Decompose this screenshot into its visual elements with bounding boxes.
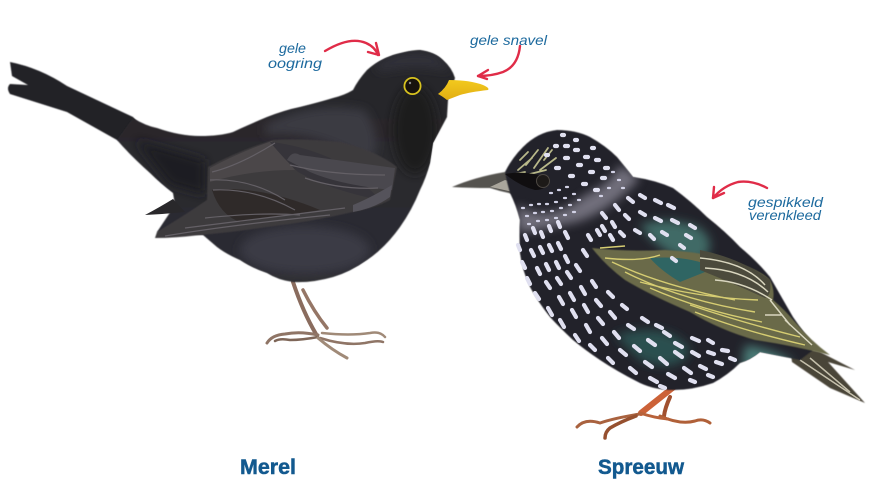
arrow: naar gele snavel (478, 46, 520, 79)
merel back sheen (264, 104, 378, 153)
label: gespikkeld verenkleed: verenkleed (749, 207, 822, 223)
spreeuw crown buff streaks (510, 148, 556, 175)
illustration: merel (blackbird) (8, 50, 488, 358)
illustration: spreeuw (starling) (452, 130, 865, 438)
spreeuw tail (790, 345, 865, 403)
merel head (375, 53, 450, 72)
merel legs (267, 282, 385, 358)
merel tail (8, 62, 160, 150)
spreeuw body shading (517, 165, 795, 368)
heading: Spreeuw: Spreeuw (598, 456, 685, 479)
arrow: naar gele oogring (325, 41, 379, 55)
merel wing (155, 139, 397, 238)
spreeuw white spots (518, 135, 735, 388)
spreeuw small throat spots (522, 172, 624, 224)
label: gele snavel: gele snavel (470, 32, 548, 48)
merel eye with yellow ring (404, 77, 422, 95)
spreeuw eye stripe (505, 173, 550, 190)
label: gele oogring (268, 40, 322, 71)
merel body (117, 50, 455, 282)
spreeuw wing (592, 246, 830, 355)
spreeuw beak (452, 172, 530, 195)
arrow: naar gespikkeld verenkleed (713, 182, 767, 198)
spreeuw eye (536, 174, 550, 188)
merel belly sheen (240, 226, 370, 274)
spreeuw body (505, 130, 817, 390)
spreeuw iridescent patches (640, 221, 710, 262)
spreeuw throat grey (517, 165, 640, 232)
merel rump shadow (142, 144, 206, 195)
label: gespikkeld verenkleed (748, 194, 824, 223)
label: gespikkeld verenkleed: gespikkeld (748, 194, 824, 210)
merel body shading (135, 86, 437, 274)
spreeuw legs (577, 378, 710, 438)
merel beak (438, 80, 488, 100)
merel neck and throat shadow (393, 86, 437, 174)
label: gele oogring: oogring (268, 55, 322, 71)
heading: Merel: Merel (240, 456, 296, 479)
label: gele oogring: gele (279, 40, 306, 56)
merel under tail covert (145, 199, 185, 215)
